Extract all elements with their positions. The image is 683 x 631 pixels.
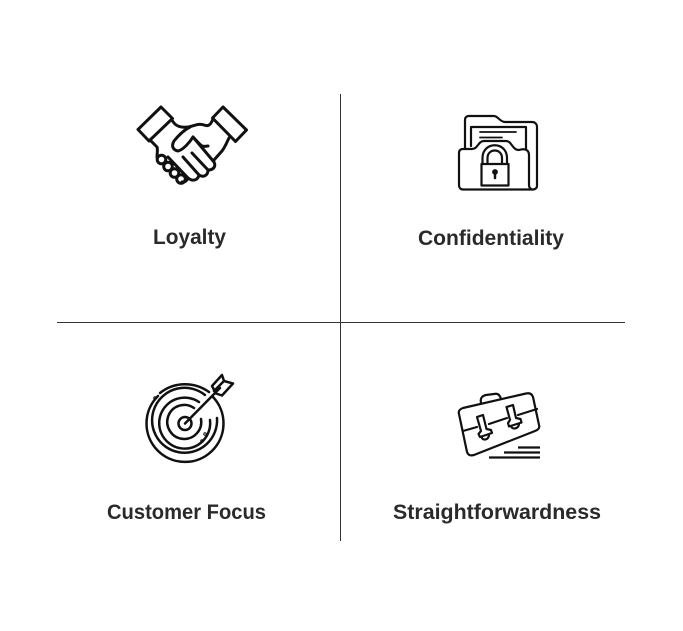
label: customer focus: Customer Focus [107, 501, 266, 524]
icon: tilted briefcase [459, 393, 539, 455]
label: confidentiality: Confidentiality [418, 227, 564, 250]
panel: customer focus [107, 375, 266, 524]
panel: confidentiality [418, 116, 564, 250]
icon: handshake [138, 107, 246, 183]
panel: loyalty [138, 107, 246, 249]
icon: speed lines [489, 448, 540, 458]
panel: straightforwardness [393, 393, 601, 524]
label: loyalty: Loyalty [153, 226, 226, 249]
label: straightforwardness: Straightforwardness [393, 501, 601, 524]
icon: target with arrow [147, 375, 233, 462]
icon: locked folder [459, 116, 537, 190]
